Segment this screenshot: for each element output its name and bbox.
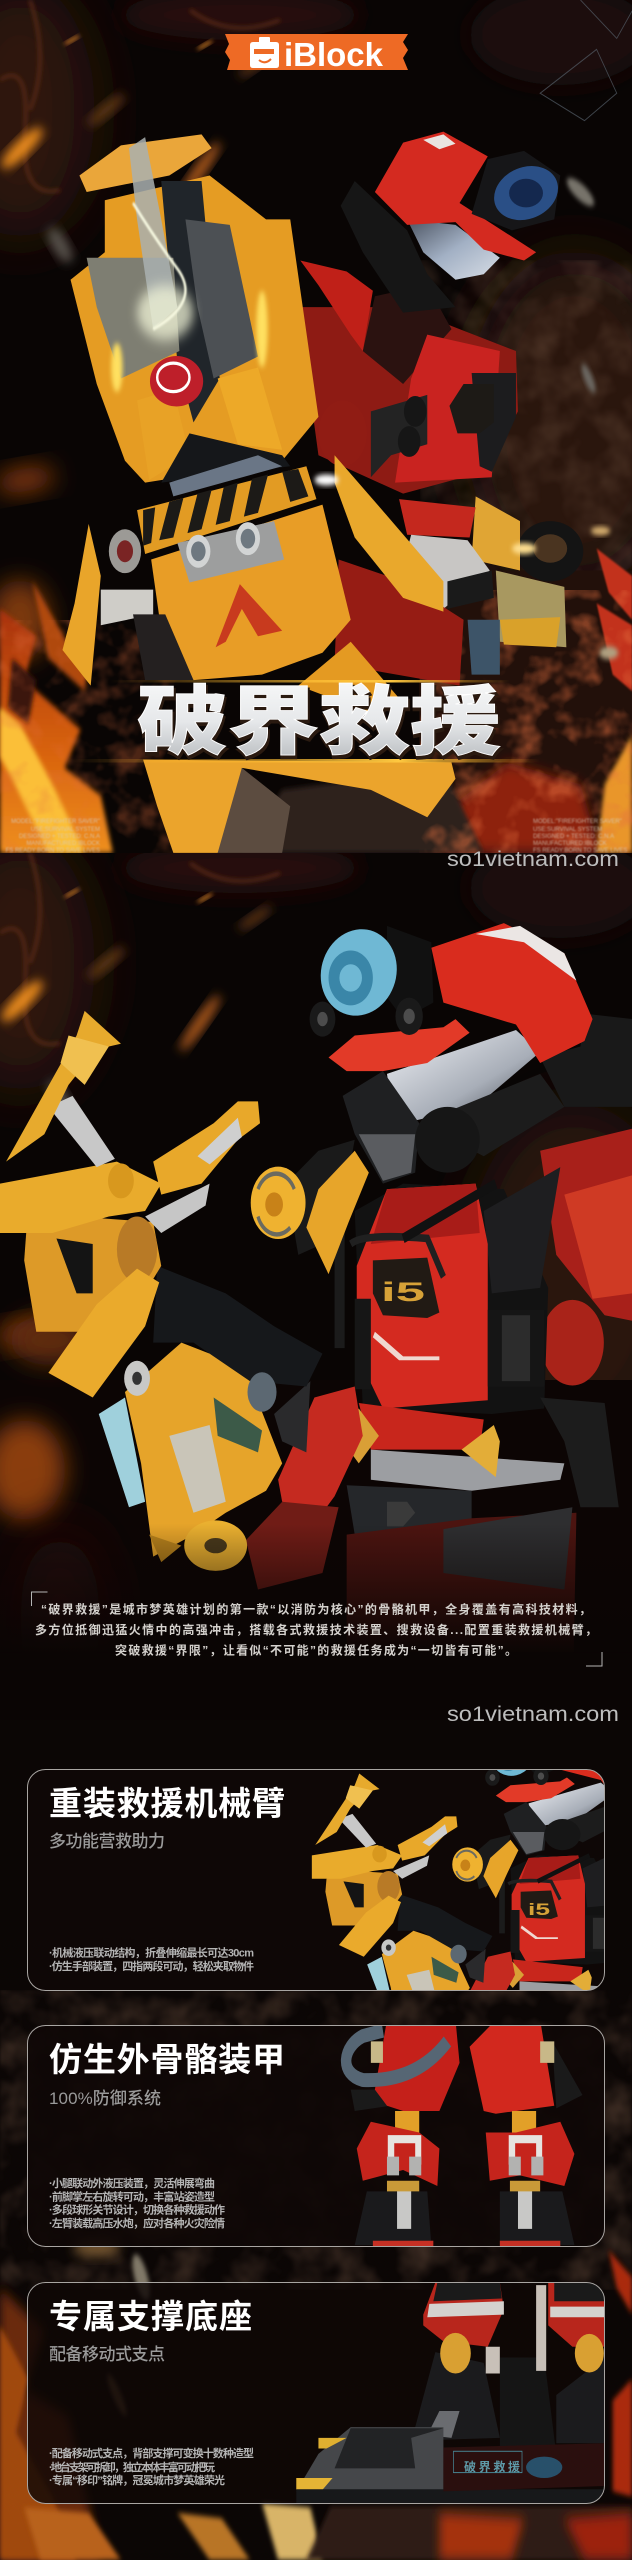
bullets bbox=[49, 1946, 254, 1973]
robot: helmet bbox=[341, 132, 561, 313]
logo: iBlock ribbon: iBlock bbox=[284, 36, 384, 73]
spec text: left: DESIGNED + TESTED: C.N.A bbox=[19, 834, 100, 840]
subheading: 100%防御系统 bbox=[49, 2089, 161, 2108]
bullets: ·前脚掌左右旋转可动，丰富站姿造型 bbox=[49, 2190, 215, 2204]
heading: 仿生外骨骼装甲 bbox=[49, 2041, 285, 2078]
heading: 专属支撑底座 bbox=[49, 2298, 252, 2335]
fire: right embers bbox=[242, 549, 632, 853]
bullets: ·配备移动式支点，背部支撑可变换十数种造型 bbox=[49, 2446, 254, 2460]
intro text block: 突破救援“界限”，让看似“不可能”的救援任务成为“一切皆有可能”。 bbox=[115, 1642, 517, 1658]
plaque text: 破界救援 bbox=[464, 2459, 520, 2474]
illustration: arm close-up: i5 bbox=[528, 1900, 550, 1919]
bullets: ·地台支架可拆卸，独立本体丰富可动把玩 bbox=[49, 2460, 215, 2474]
bullets: ·专属“移印”铭牌，冠冕城市梦英雄荣光 bbox=[49, 2473, 225, 2487]
logo: iBlock ribbon bbox=[225, 34, 408, 73]
heading: 重装救援机械臂 bbox=[49, 1785, 285, 1822]
robot: yellow cannon arm bbox=[71, 134, 318, 483]
illustration: legs bbox=[346, 2020, 582, 2250]
watermark: top: so1vietnam.com bbox=[447, 848, 619, 871]
illustration: intro robot bbox=[0, 920, 632, 1724]
panel: 专属支撑底座 bbox=[28, 2282, 605, 2504]
fire: left bottom bbox=[0, 581, 113, 853]
spec text: left bbox=[6, 819, 100, 854]
spec text: right: MODEL:"FIREFIGHTER SAVER" bbox=[533, 819, 622, 825]
panel: 仿生外骨骼装甲 bbox=[28, 2020, 604, 2250]
spec text: left: FS READY:BORN TO SAVE LIVES bbox=[6, 848, 100, 854]
bullets: ·机械液压联动结构，折叠伸缩最长可达30cm bbox=[49, 1946, 254, 1960]
lightning glow bbox=[137, 285, 193, 340]
spec text: right: FS READY:BORN TO SAVE LIVES bbox=[533, 848, 627, 854]
subheading: 配备移动式支点 bbox=[49, 2345, 165, 2364]
background: hero section bbox=[0, 0, 632, 854]
robot: yellow shoulder with hazard band bbox=[62, 455, 456, 853]
subheading: 多功能营救助力 bbox=[49, 1832, 165, 1851]
background: features section bbox=[0, 1720, 632, 2560]
panel: 重装救援机械臂 bbox=[27, 1769, 605, 1991]
spec text: left: USE:SURVIVAL SYSTEM bbox=[31, 827, 100, 833]
spec text: left: MODEL:"FIREFIGHTER SAVER" bbox=[11, 819, 100, 825]
illustration: base and feet bbox=[296, 2282, 605, 2503]
intro text block: 多方位抵御迅猛火情中的高强冲击，搭载各式救援技术装置、搜救设备...配置重装救援机械臂， bbox=[35, 1622, 597, 1637]
bullets: ·小腿联动外液压装置，灵活伸展弯曲 bbox=[49, 2176, 215, 2190]
watermark: bottom: so1vietnam.com bbox=[447, 1703, 619, 1726]
illustration: arm close-up bbox=[312, 1770, 604, 1990]
illustration: hero robot bbox=[62, 132, 583, 853]
spec text: right: DESIGNED + TESTED: C.N.A bbox=[533, 834, 614, 840]
corner bracket: bottom right bbox=[586, 1652, 602, 1666]
title: 破界救援: 破界救援 bbox=[137, 661, 501, 771]
sparks glow bbox=[564, 173, 597, 211]
title: 破界救援: 破界救援 bbox=[138, 664, 502, 774]
bullets bbox=[49, 2176, 225, 2230]
spec text: left: MANUFACTURED:IBLOCK bbox=[26, 841, 100, 847]
badge text: i5: i5 bbox=[381, 1277, 425, 1307]
spec text: right bbox=[533, 819, 627, 854]
spec text: right: MANUFACTURED:IBLOCK bbox=[533, 841, 607, 847]
icon: logo bag bbox=[250, 37, 279, 68]
bullets bbox=[49, 2446, 254, 2487]
intro text block: “破界救援”是城市梦英雄计划的第一款“以消防为核心”的骨骼机甲，全身覆盖有高科技材料， bbox=[41, 1602, 591, 1616]
spec text: right: USE:SURVIVAL SYSTEM bbox=[533, 827, 602, 833]
bullets: ·左臂装载高压水炮，应对各种火灾险情 bbox=[49, 2216, 225, 2230]
robot: red body bbox=[298, 261, 583, 686]
intro text block bbox=[32, 1592, 602, 1666]
title: 破界救援 bbox=[82, 680, 534, 762]
section: intro background and robot bbox=[0, 833, 632, 1724]
corner bracket: top left bbox=[32, 1592, 48, 1606]
bullets: ·多段球形关节设计，切换各种救援动作 bbox=[49, 2202, 225, 2216]
bullets: ·仿生手部装置，四指两段可动，轻松夹取物件 bbox=[49, 1959, 254, 1973]
